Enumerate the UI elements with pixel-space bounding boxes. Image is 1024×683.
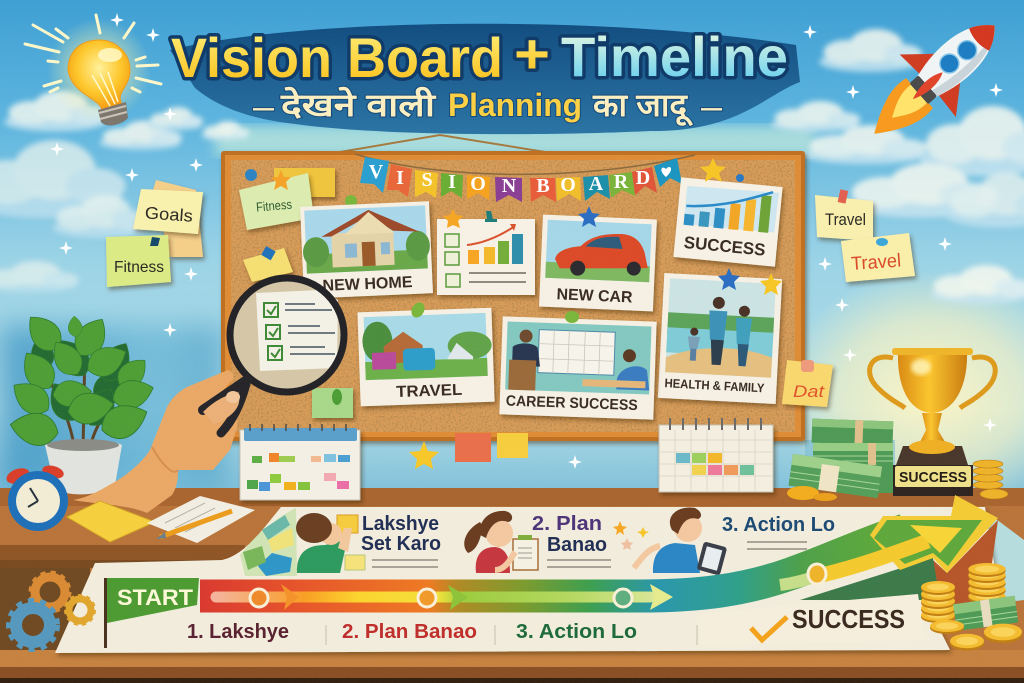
timeline labels: 3. Action Lo [516,621,637,643]
heading: Vision Board + Timeline: Timeline [561,25,788,88]
text: Lakshye Set Karo: Set Karo [361,533,441,555]
calendar left [240,424,360,500]
subtitle: — [253,95,274,122]
icon: green pin on Career [565,311,579,323]
title banner [170,22,800,134]
coins and cash [921,563,1022,651]
note: Goals and Fitness [106,180,203,287]
flag: START [104,578,199,648]
paper [147,496,255,543]
note: Dat [782,360,833,407]
coin stack [973,460,1008,499]
card: Career Success [499,316,657,420]
gears [9,573,94,649]
card: Health and Family [658,273,782,404]
icon: rocket [846,0,1023,165]
banner: VISION BOARD flags: D [636,167,650,189]
heading: Vision Board + Timeline: Vision Board [171,26,503,89]
clouds [0,29,1024,304]
card: New Home: NEW HOME [322,274,413,295]
kid: Plan [464,511,538,573]
subtitle: Planning [448,87,582,123]
banner: VISION BOARD flags: I [396,167,404,189]
card: New Car: NEW CAR [556,286,633,307]
sticky notes and pins on board [239,168,357,418]
banner: VISION BOARD flags: I [448,171,456,193]
icon: blue star pin [578,206,600,227]
banner: VISION BOARD flags: V [369,161,384,183]
card: Success chart [673,177,783,267]
kid: Lakshye [296,513,365,573]
card: New Home [300,201,433,299]
steps illustrated [240,507,835,576]
leaf decor [240,508,297,576]
milestone arrows [281,584,673,610]
hand with magnifying glass [73,278,344,513]
subtitle: — [701,95,722,122]
note: Dat: Dat [793,382,825,401]
subtitle [253,86,722,127]
card: Success chart: SUCCESS [683,233,766,260]
arm and hand [73,370,240,513]
card: Health and Family: HEALTH & FAMILY [664,376,765,395]
banner: VISION BOARD flags: N [502,175,517,197]
subtitle: का जादू [592,87,693,127]
banner: VISION BOARD flags [355,154,695,202]
milestone nodes [250,564,826,607]
brown arrow shadow box [933,520,998,606]
banner: VISION BOARD flags: R [614,171,629,193]
trophy [870,348,1008,499]
notes: Travel [815,189,915,282]
timeline labels [187,621,637,643]
card: Travel [357,308,495,406]
kid: Action [634,507,727,576]
text: 2. Plan Banao: 2. Plan [532,513,602,535]
sparkles [50,13,1003,469]
plant [6,308,157,494]
magnifier lens [230,278,344,392]
progress ribbon arrow [200,495,998,610]
text: 3. Action Lo: 3. Action Lo [722,514,835,536]
plant pot [45,440,122,494]
banner: VISION BOARD flags: B [536,175,550,197]
card: Travel: TRAVEL [396,382,463,401]
trophy: SUCCESS [899,469,967,486]
text: Lakshye Set Karo: Lakshye [362,513,439,535]
card: progress chart [437,209,535,295]
money stacks [787,419,893,501]
heading: Vision Board + Timeline [171,22,788,89]
banner: VISION BOARD flags: O [560,174,576,196]
note: Goals and Fitness: Fitness [114,259,164,276]
desk [0,488,1024,683]
icon: green pin on Travel [409,300,427,320]
timeline labels: 2. Plan Banao [342,621,477,643]
magnifier handle [203,380,247,410]
banner: VISION BOARD flags: S [421,169,433,191]
timeline labels: 1. Lakshye [187,621,289,643]
text: Lakshye Set Karo [361,513,441,555]
check and SUCCESS: SUCCESS [792,604,905,634]
sticky notes and pins on board: Fitness [255,197,293,215]
subtitle: देखने वाली [280,86,437,123]
banner: VISION BOARD flags: O [470,173,486,195]
calendar right [659,418,773,492]
card: New Car [539,215,657,311]
heading: Vision Board + Timeline: + [514,22,550,85]
pencil [160,511,232,537]
banner: VISION BOARD flags: A [589,173,604,195]
note: Goals and Fitness: Goals [144,203,193,226]
notes: Travel: Travel [850,251,902,275]
desk items: clock, notepad, paper and pencil [4,463,255,543]
timeline panel [55,495,1024,653]
vision board [221,135,805,441]
trophy base [896,446,968,465]
notes: Travel: Travel [825,210,866,229]
icon: gold star and pin [700,158,744,182]
text: 2. Plan Banao [532,513,607,556]
star and hanging notes [409,433,528,469]
check and SUCCESS [700,594,925,645]
icon: light bulb [25,15,161,125]
text: 2. Plan Banao: Banao [547,534,607,556]
icon: star pins on family card [718,268,782,295]
notepad [67,501,155,542]
stars near Plan Banao [613,521,649,550]
flag: START: START [117,585,194,610]
dark green ground under ribbon [800,558,940,600]
card: Career Success: CAREER SUCCESS [506,393,638,414]
icon: alarm clock [4,463,68,531]
